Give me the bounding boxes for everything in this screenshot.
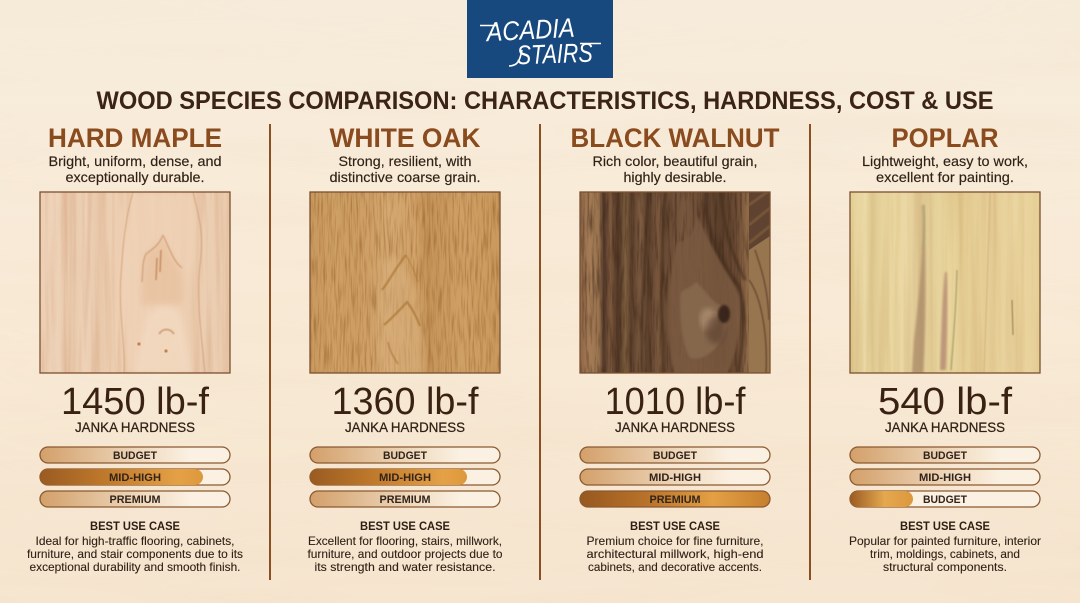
description: white oak: distinctive coarse grain. <box>330 169 480 185</box>
description: hard maple: exceptionally durable. <box>66 169 204 185</box>
cost bars: poplar: BUDGET <box>923 494 967 506</box>
cost bars: white oak <box>310 447 500 507</box>
logo: Acadia Stairs: ACADIA <box>484 13 575 47</box>
best use case: hard maple: Ideal for high-traffic flooring, cabinets, <box>36 534 234 548</box>
logo: Acadia Stairs <box>467 0 613 78</box>
best use case: white oak: BEST USE CASE <box>360 519 450 533</box>
best use case: white oak: furniture, and outdoor projects due to <box>308 547 503 561</box>
hardness value: hard maple: 1450 lb-f <box>61 381 209 423</box>
best use case: hard maple: exceptional durability and smooth finish. <box>30 560 240 574</box>
hardness label: white oak: JANKA HARDNESS <box>345 419 465 435</box>
best use case: black walnut: BEST USE CASE <box>630 519 720 533</box>
divider 2 <box>539 124 541 580</box>
cost bars: black walnut <box>580 447 770 507</box>
cost bars: hard maple: MID-HIGH <box>109 472 161 484</box>
cost bars: black walnut: BUDGET <box>653 450 697 462</box>
cost bars: hard maple <box>40 447 230 507</box>
cost bars: white oak: BUDGET <box>383 450 427 462</box>
best use case: black walnut <box>586 519 764 574</box>
title: WOOD SPECIES COMPARISON: CHARACTERISTICS, HARDNESS, COST & USE <box>96 87 994 115</box>
best use case: hard maple: furniture, and stair components due to its <box>27 547 243 561</box>
best use case: poplar: structural components. <box>883 560 1007 574</box>
heading: hard maple: HARD MAPLE <box>48 123 222 153</box>
panel: poplar <box>849 123 1041 574</box>
best use case: black walnut: Premium choice for fine furniture, <box>586 534 764 548</box>
description: hard maple <box>48 153 222 185</box>
best use case: poplar: Popular for painted furniture, interior <box>849 534 1041 548</box>
divider 1 <box>269 124 271 580</box>
logo: Acadia Stairs: STAIRS <box>516 38 593 70</box>
hardness label: black walnut: JANKA HARDNESS <box>615 419 735 435</box>
description: black walnut: Rich color, beautiful grain, <box>592 153 758 169</box>
cost bars: black walnut: MID-HIGH <box>649 472 701 484</box>
cost bars: hard maple: PREMIUM <box>110 494 160 506</box>
hardness value: black walnut: 1010 lb-f <box>604 381 746 423</box>
description: poplar <box>862 153 1028 185</box>
panel: black walnut <box>570 123 780 574</box>
panel: white oak <box>308 123 503 574</box>
cost bars: black walnut: PREMIUM <box>650 494 700 506</box>
best use case: hard maple: BEST USE CASE <box>90 519 180 533</box>
best use case: white oak <box>308 519 503 574</box>
wood sample: hard maple <box>40 192 230 373</box>
cost bars: white oak: MID-HIGH <box>379 472 431 484</box>
description: white oak: Strong, resilient, with <box>338 153 472 169</box>
description: hard maple: Bright, uniform, dense, and <box>48 153 222 169</box>
hardness label: hard maple: JANKA HARDNESS <box>75 419 195 435</box>
wood sample: poplar <box>850 192 1040 373</box>
heading: black walnut: BLACK WALNUT <box>570 123 780 153</box>
cost bars: hard maple: BUDGET <box>113 450 157 462</box>
hardness label: poplar: JANKA HARDNESS <box>885 419 1005 435</box>
best use case: hard maple <box>27 519 243 574</box>
heading: white oak: WHITE OAK <box>330 123 481 153</box>
cost bars: poplar: MID-HIGH <box>919 472 971 484</box>
cost bars: poplar: BUDGET <box>923 450 967 462</box>
best use case: white oak: its strength and water resistance. <box>314 560 496 574</box>
best use case: white oak: Excellent for flooring, stairs, millwork, <box>308 534 502 548</box>
best use case: poplar <box>849 519 1041 574</box>
description: poplar: excellent for painting. <box>876 169 1014 185</box>
panel: hard maple <box>27 123 243 574</box>
best use case: black walnut: cabinets, and decorative accents. <box>588 560 762 574</box>
description: poplar: Lightweight, easy to work, <box>862 153 1028 169</box>
cost bars: white oak: PREMIUM <box>380 494 430 506</box>
hardness value: white oak: 1360 lb-f <box>332 381 479 423</box>
hardness value: poplar: 540 lb-f <box>878 381 1012 423</box>
description: black walnut: highly desirable. <box>624 169 726 185</box>
description: white oak <box>330 153 480 185</box>
wood sample: white oak <box>310 192 500 373</box>
cost bars: poplar <box>850 447 1040 507</box>
best use case: poplar: trim, moldings, cabinets, and <box>870 547 1020 561</box>
heading: poplar: POPLAR <box>892 123 998 153</box>
divider 3 <box>809 124 811 580</box>
description: black walnut <box>592 153 758 185</box>
best use case: poplar: BEST USE CASE <box>900 519 990 533</box>
wood sample: black walnut <box>580 190 770 373</box>
best use case: black walnut: architectural millwork, high-end <box>586 547 764 561</box>
